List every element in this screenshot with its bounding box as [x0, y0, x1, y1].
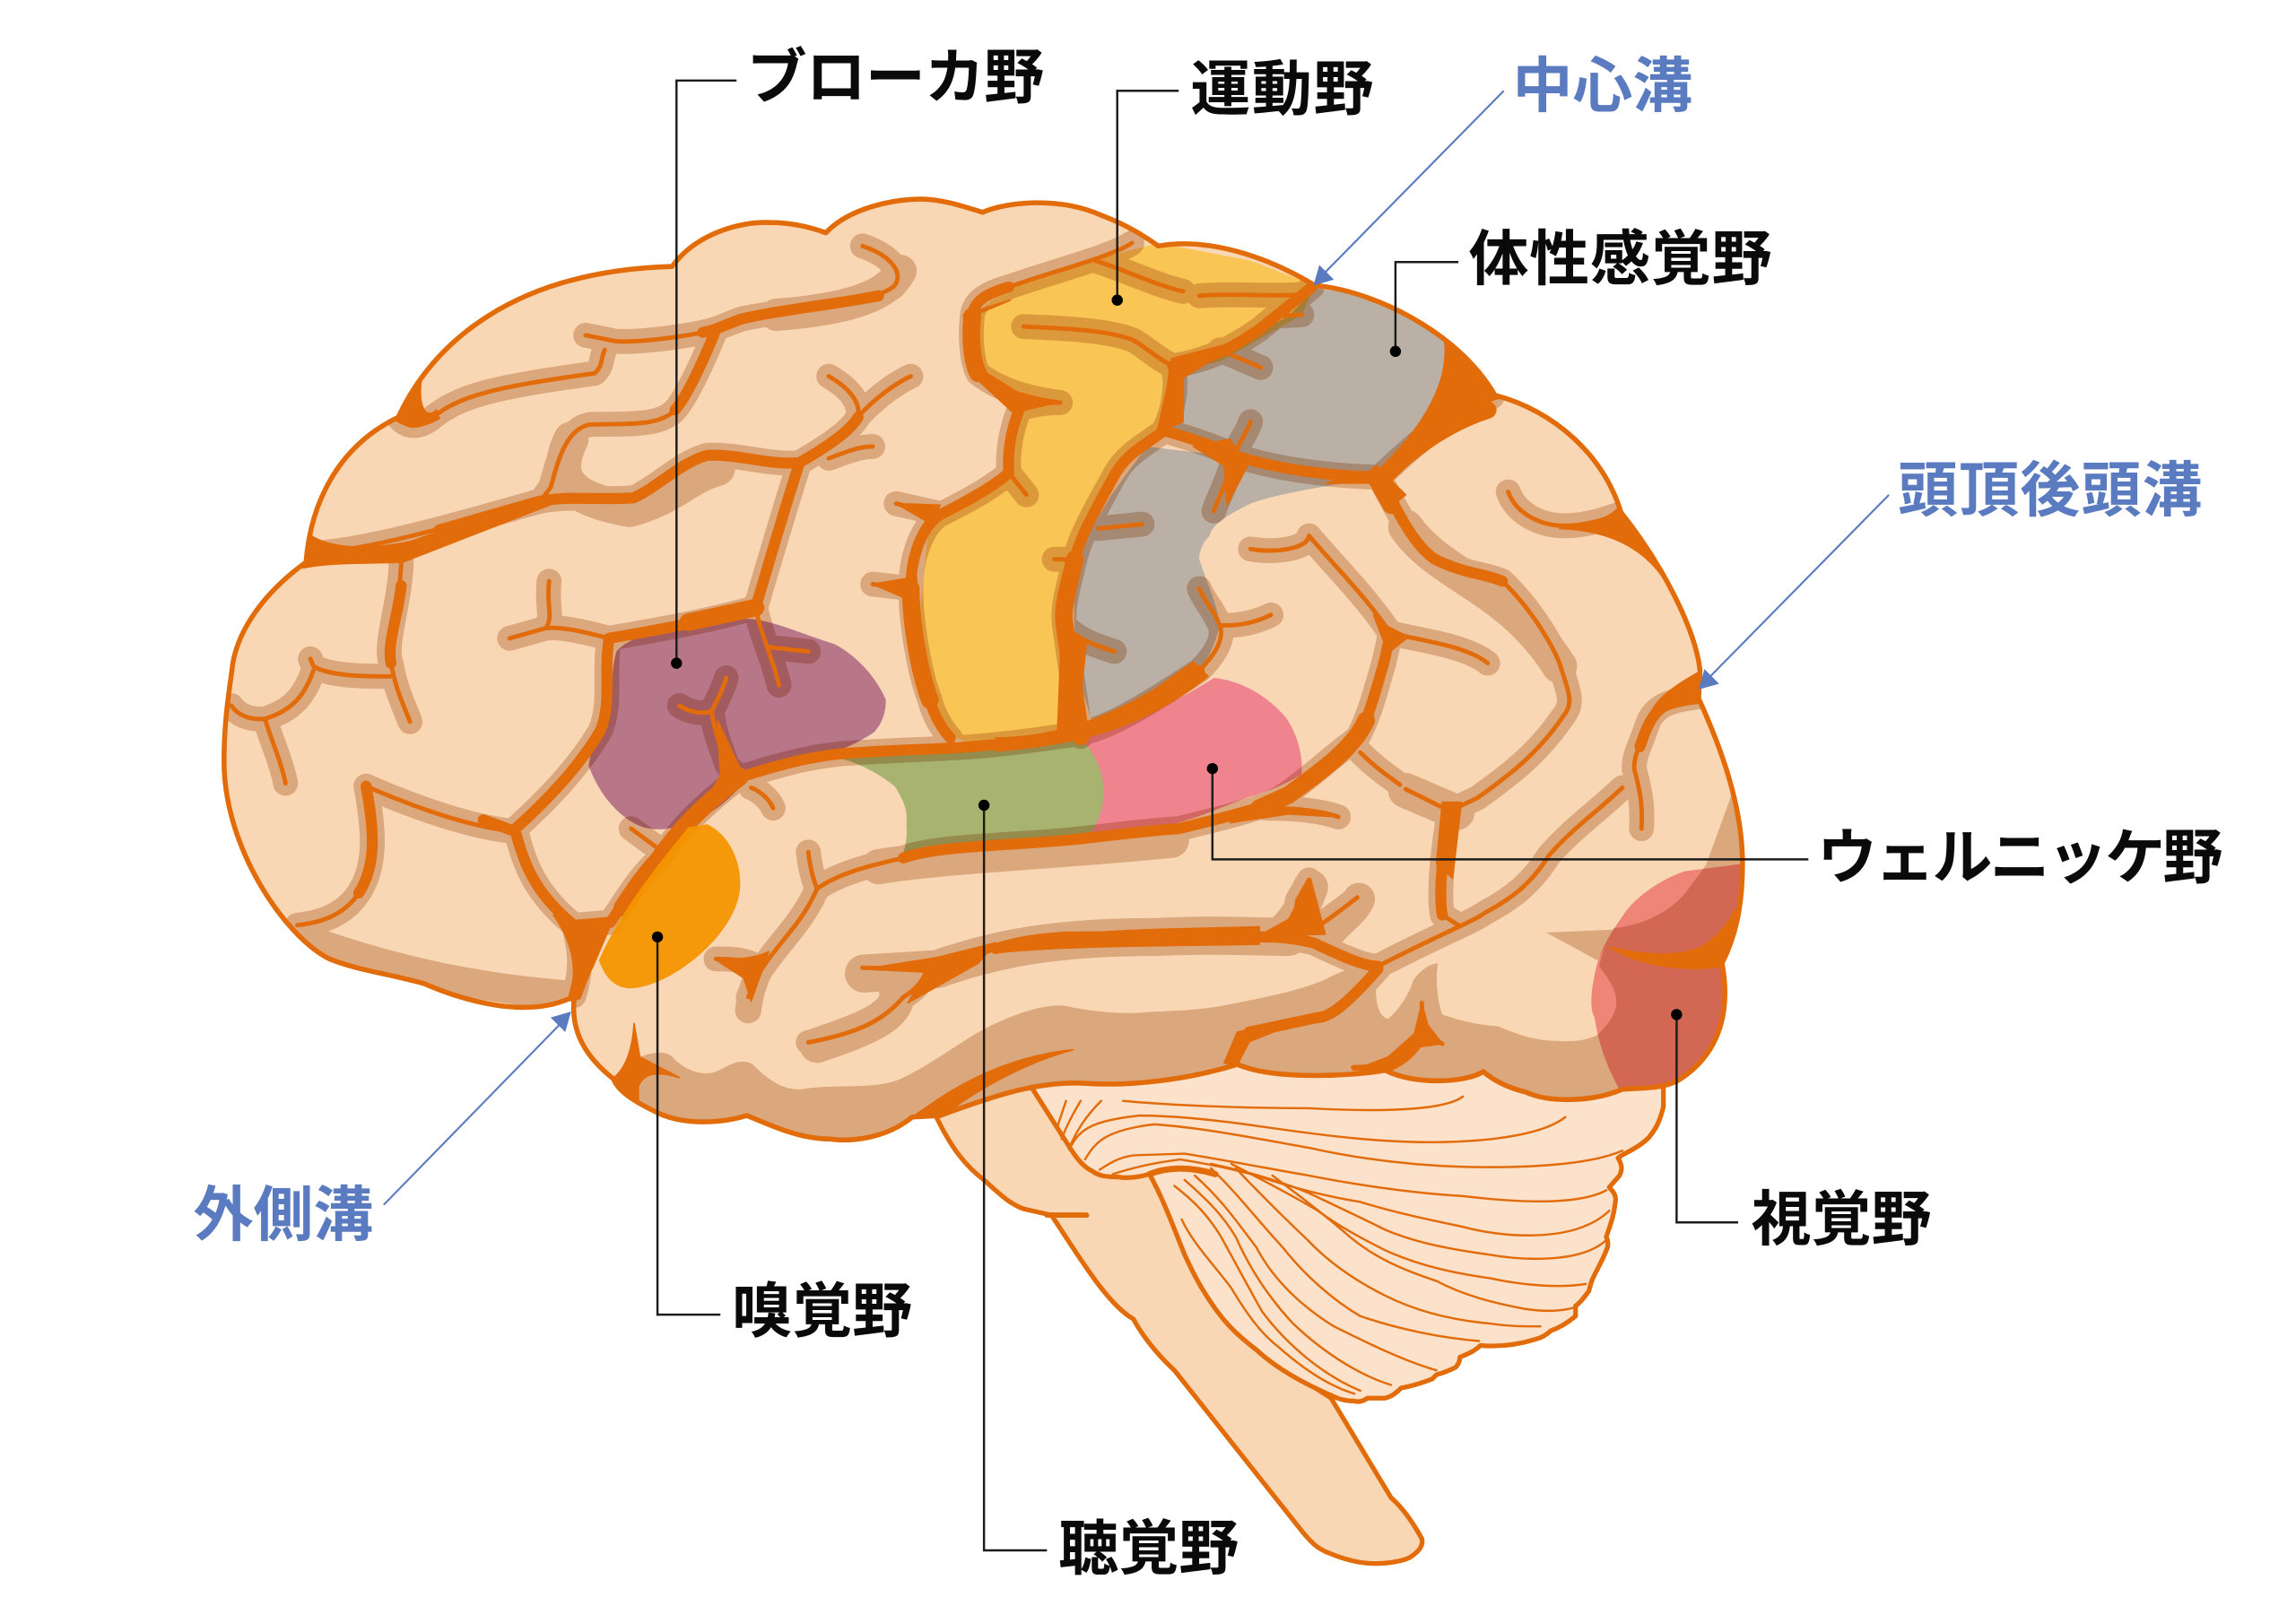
cerebrum outline [224, 199, 1743, 1140]
label: olfactory area: 嗅覚野 [732, 1279, 912, 1346]
cerebellum folia lines [1057, 1097, 1622, 1393]
leader: Wernicke's area [1207, 763, 1808, 859]
label: parieto-occipital sulcus: 頭頂後頭溝 [1898, 457, 2203, 525]
motor area [919, 243, 1315, 742]
sulci [231, 243, 1736, 1120]
occipital wedge shading [1546, 930, 1613, 960]
sulcus shading [231, 243, 1699, 1067]
somatosensory area lower [1074, 447, 1343, 719]
label: Wernicke's area: ウェルニッケ野 [1817, 825, 2222, 892]
arrow: central sulcus [1313, 91, 1504, 285]
arrow: parieto-occipital sulcus [1699, 495, 1889, 690]
arrow: lateral sulcus [384, 1011, 571, 1205]
brainstem [935, 1055, 1422, 1564]
leader: visual area [1671, 1009, 1738, 1222]
label: motor area: 運動野 [1190, 56, 1373, 123]
thick sulcus trunks [359, 287, 1684, 1066]
cerebellar peduncle stroke [1150, 1168, 1215, 1174]
thin sulcus lines [231, 243, 1699, 1067]
leader: olfactory area [652, 932, 720, 1315]
widest sulcus trunks [622, 317, 1488, 907]
Wernicke's area [1085, 678, 1302, 832]
wide sulcus shading [563, 271, 1560, 1046]
olfactory area [599, 824, 740, 988]
cerebrum surface and coloured functional areas [205, 176, 1772, 1157]
leader: Broca's area [671, 81, 736, 669]
sulcus wedges and junctions [301, 300, 1736, 1120]
cerebrum base [226, 201, 1731, 1089]
leader: somatosensory area [1390, 262, 1458, 357]
temporal and occipital shading [613, 789, 1750, 1157]
frontal base shading [300, 937, 574, 995]
somatosensory area upper [1169, 289, 1458, 477]
visual area [1591, 864, 1745, 1095]
Broca's area [588, 619, 886, 829]
label: Broca's area: ブローカ野 [747, 44, 1044, 111]
brainstem stub stroke [1047, 1213, 1086, 1217]
cerebellum [1031, 1046, 1664, 1402]
leader: motor area [1112, 91, 1178, 306]
label: lateral sulcus: 外側溝 [194, 1182, 373, 1249]
label: visual area: 視覚野 [1752, 1186, 1931, 1254]
label: central sulcus: 中心溝 [1513, 53, 1692, 120]
leader: auditory area [978, 800, 1047, 1550]
brain illustration [205, 176, 1772, 1564]
auditory area [843, 741, 1104, 852]
label: auditory area: 聴覚野 [1058, 1515, 1239, 1583]
label: somatosensory area: 体性感覚野 [1469, 226, 1772, 293]
